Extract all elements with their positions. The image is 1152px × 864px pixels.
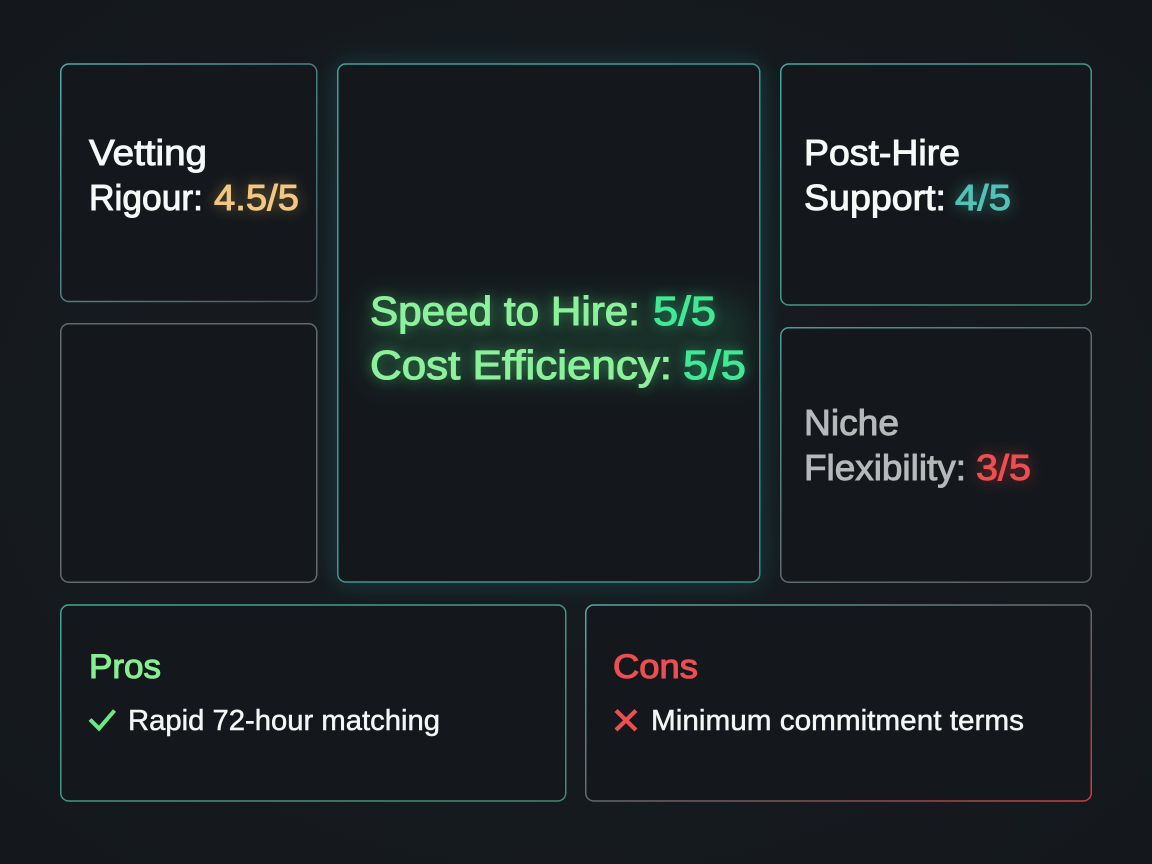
green text haze [366, 296, 750, 384]
panel frame [586, 605, 1091, 801]
metric label: post-hire support: Support: [804, 177, 946, 218]
metric label: niche flexibility: 3/5 [976, 447, 1031, 488]
panel frame [61, 64, 317, 302]
metric label: vetting rigour: 4.5/5 [214, 177, 299, 218]
metric label: post-hire support: 4/5 [955, 177, 1011, 218]
metric label: vetting rigour: Rigour: [89, 177, 203, 218]
panel: vetting rigour [61, 64, 317, 302]
pros heading: Pros [89, 648, 161, 686]
panel frame [338, 64, 760, 582]
metric label: niche flexibility [804, 402, 1031, 488]
panel: cons [586, 605, 1091, 801]
pros item: Rapid 72-hour matching [128, 705, 440, 737]
metric label: speed to hire and cost efficiency: 5/5 [683, 342, 746, 388]
panel: post-hire support [781, 64, 1091, 305]
metric label: vetting rigour: Vetting [89, 132, 207, 173]
icon: cross mark [616, 710, 636, 730]
metric label: speed to hire and cost efficiency [370, 288, 746, 388]
panel: empty card [61, 324, 317, 582]
metric label: speed to hire and cost efficiency: 5/5 [653, 288, 716, 334]
panel: pros [61, 605, 566, 801]
cons item: Minimum commitment terms [651, 705, 1024, 737]
panel frame [781, 328, 1091, 582]
metric label: speed to hire and cost efficiency: Cost Efficiency: [370, 342, 672, 388]
panel: speed and cost [338, 64, 760, 582]
cons heading: Cons [613, 648, 698, 686]
metric label: post-hire support: Post-Hire [804, 132, 960, 173]
metric label: speed to hire and cost efficiency: Speed to Hire: [370, 288, 640, 334]
metric label: niche flexibility: Flexibility: [804, 447, 966, 488]
panel: niche flexibility [781, 328, 1091, 582]
metric label: niche flexibility: Niche [804, 402, 899, 443]
metric label: vetting rigour [89, 132, 299, 218]
panel frame [781, 64, 1091, 305]
metric label: post-hire support [804, 132, 1011, 218]
panel frame [61, 605, 566, 801]
center panel glow [337, 64, 760, 582]
icon: check mark [90, 710, 114, 728]
